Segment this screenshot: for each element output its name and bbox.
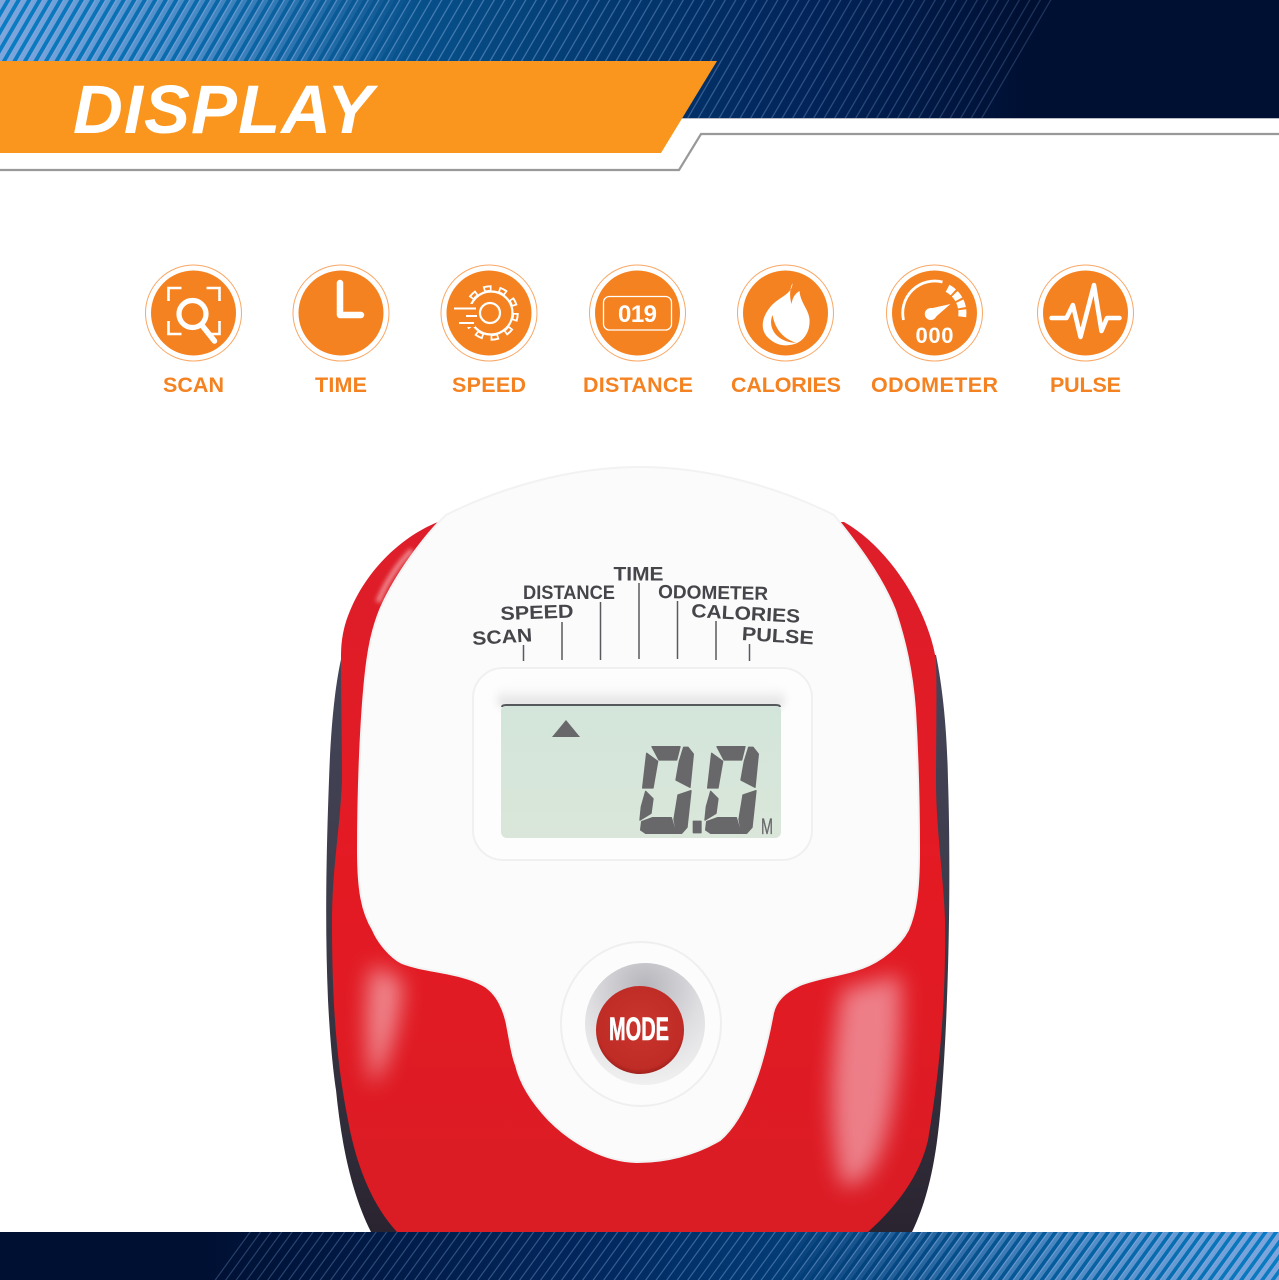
title banner xyxy=(0,61,1279,170)
header band xyxy=(0,0,1279,119)
label: speed: SPEED xyxy=(452,373,526,397)
LCD digits xyxy=(640,747,758,833)
icon: distance: 019 xyxy=(618,301,657,328)
red surface highlights xyxy=(367,550,901,1185)
label: odometer: ODOMETER xyxy=(871,373,998,397)
LCD indicator triangle xyxy=(552,720,580,737)
mode labels on faceplate: ODOMETER xyxy=(658,582,769,605)
device back shell xyxy=(326,655,949,1232)
mode labels on faceplate: TIME xyxy=(614,564,664,586)
title banner: DISPLAY xyxy=(73,71,379,148)
mode labels on faceplate: PULSE xyxy=(741,624,814,649)
LCD value text: unit: M xyxy=(761,814,773,839)
icon: calories xyxy=(738,265,834,361)
icon: time xyxy=(293,265,389,361)
icon: odometer xyxy=(886,265,982,361)
mode button xyxy=(561,942,721,1106)
mode labels on faceplate: SCAN xyxy=(472,625,533,650)
icon: speed xyxy=(441,265,537,361)
LCD screen xyxy=(501,705,781,839)
mode labels on faceplate: SPEED xyxy=(500,601,574,625)
footer band xyxy=(0,1232,1279,1280)
mode labels on faceplate: CALORIES xyxy=(691,601,801,628)
label: distance: DISTANCE xyxy=(583,373,693,397)
device: fitness monitor xyxy=(326,467,949,1232)
display bezel xyxy=(473,668,812,860)
icon: pulse xyxy=(1038,265,1134,361)
label: pulse: PULSE xyxy=(1050,373,1121,397)
mode labels on faceplate xyxy=(472,564,814,650)
device red body xyxy=(332,522,945,1232)
icon row xyxy=(146,265,1134,397)
label: calories: CALORIES xyxy=(731,373,841,397)
icon: scan xyxy=(146,265,242,361)
mode tick lines xyxy=(524,583,750,661)
icon: odometer: 000 xyxy=(916,323,954,348)
mode button: MODE xyxy=(609,1011,669,1047)
label: time: TIME xyxy=(315,373,367,397)
mode labels on faceplate: DISTANCE xyxy=(523,583,615,604)
icon: distance xyxy=(590,265,686,361)
label: scan: SCAN xyxy=(163,373,224,397)
device white faceplate xyxy=(358,467,919,1162)
